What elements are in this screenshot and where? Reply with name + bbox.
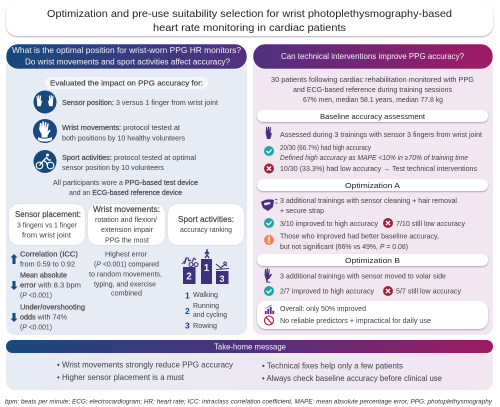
- card: wrist movements: [88, 204, 165, 245]
- panel: right, technical interventions: [253, 44, 493, 335]
- study population: 67% men, median 58.1 years, median 77.8 kg: [303, 95, 443, 104]
- wrist movement results: Highest error: [105, 250, 148, 258]
- title: Optimization and pre-use suitability selection for wrist photoplethysmography-based: [47, 9, 452, 20]
- baseline text: 20/30 (66.7%) had high accuracy: [280, 143, 371, 152]
- participants note: All participants wore a PPG-based test device: [53, 178, 198, 187]
- panel: take-home message: [6, 340, 493, 390]
- icon: check B: [264, 286, 274, 296]
- icon: warning: [264, 235, 274, 245]
- wrist movement results: typing, and exercise: [94, 280, 156, 288]
- sensor position text: Sensor position: 3 versus 1 finger from wrist joint: [62, 98, 218, 107]
- wrist movement results: [89, 250, 162, 298]
- panel: take-home message: Take-home message: [214, 342, 286, 352]
- sensor placement results: from 0.59 to 0.92: [20, 260, 75, 268]
- icon: rower: [216, 262, 229, 270]
- sport activities text: Sport activities: protocol tested at optimal: [62, 153, 196, 162]
- optimization A text: 3 additional trainings with sensor cleaning + hair removal: [280, 196, 457, 205]
- icon: up arrow: [10, 254, 18, 264]
- card: sport activities: accuracy ranking: [180, 225, 232, 234]
- icon: three fingers: [266, 126, 272, 139]
- icon: down arrow odds: [10, 313, 18, 322]
- icon: cross baseline: [264, 164, 274, 174]
- wrist movements text: Wrist movements: protocol tested at: [62, 123, 180, 132]
- sensor placement results: Correlation (ICC): [20, 250, 78, 258]
- icon: sensor cleaning: [261, 199, 278, 211]
- left question header: What is the optimal position for wrist-worn PPG HR monitors?: [12, 46, 242, 55]
- optimization A text: 3/10 improved to high accuracy: [280, 219, 378, 228]
- icon: check baseline: [264, 146, 274, 156]
- accuracy ranking list: Walking: [193, 290, 218, 299]
- study population: [271, 75, 474, 104]
- left question header: [6, 44, 247, 69]
- sensor placement results: odds with 74%: [20, 312, 68, 322]
- icon: prohibited: [264, 316, 274, 325]
- sensor placement results: (P <0.001): [20, 290, 52, 300]
- wrist movements text: [62, 123, 185, 142]
- heading: optimization A: [257, 179, 488, 191]
- baseline text: 10/30 (33.3%) had low accuracy → Test technical interventions: [280, 164, 477, 173]
- card: wrist movements: rotation and flexion/: [95, 215, 157, 224]
- title: [6, 2, 493, 36]
- footnote: bpm: beats per minute; ECG: electrocardiogram; HR: heart rate; ICC: intraclass correlation coefficient, MAPE: mean absolute percentage error; PPG: photoplethysmography: [5, 398, 493, 406]
- podium chart: [182, 249, 229, 284]
- podium chart: 3: [220, 274, 225, 284]
- heading: baseline: [257, 110, 488, 122]
- take-home bullets right: • Always check baseline accuracy before clinical use: [262, 374, 442, 383]
- icon: check A: [264, 218, 274, 228]
- right question header: [253, 44, 493, 69]
- card: sensor placement: from wrist joint: [22, 230, 71, 240]
- accuracy ranking list: [185, 290, 227, 330]
- card: sport activities: Sport activities:: [178, 215, 234, 224]
- accuracy ranking list: 1: [185, 290, 190, 300]
- optimization B text: 2/7 improved to high accuracy: [280, 286, 374, 296]
- baseline text: Defined high accuracy as MAPE <10% in ≥70% of training time: [280, 153, 468, 162]
- card: wrist movements: Wrist movements:: [93, 205, 160, 214]
- card: sport activities: [168, 204, 244, 245]
- heading: optimization B: [257, 254, 488, 266]
- heading: baseline: Baseline accuracy assessment: [320, 112, 426, 121]
- take-home bullets left: • Higher sensor placement is a must: [57, 373, 185, 382]
- take-home bullets right: [262, 362, 442, 383]
- sensor placement results: (P <0.001): [20, 322, 52, 332]
- icon: sensor position hands: [34, 90, 56, 114]
- podium chart: 1: [204, 263, 210, 274]
- optimization A text: 7/10 still low accuracy: [396, 219, 465, 228]
- heading: optimization B: Optimization B: [345, 256, 400, 265]
- overall summary box: [257, 301, 488, 329]
- card: sensor placement: Sensor placement:: [15, 210, 81, 219]
- icon: wrist movement hand: [33, 119, 57, 143]
- icon: down arrow error: [10, 281, 18, 290]
- icon: volar hand: [264, 268, 272, 283]
- optimization B text: [280, 272, 461, 296]
- baseline text: [280, 130, 482, 173]
- icon: chart: [265, 305, 274, 314]
- icon: walker: [205, 249, 209, 258]
- card: sensor placement: 3 fingers vs 1 finger: [17, 220, 78, 230]
- accuracy ranking list: 2: [185, 306, 190, 316]
- card: wrist movements: PPG the most: [105, 236, 149, 244]
- wrist movement results: combined: [111, 288, 142, 298]
- accuracy ranking list: and cycling: [193, 310, 227, 319]
- optimization B text: 3 additional trainings with sensor moved to volar side: [280, 272, 446, 280]
- icon: runner and cyclist: [182, 258, 198, 266]
- title: heart rate monitoring in cardiac patients: [153, 23, 346, 34]
- study population: and ECG-based reference during training sessions: [293, 85, 452, 94]
- take-home bullets left: • Wrist movements strongly reduce PPG accuracy: [57, 360, 234, 370]
- baseline text: Assessed during 3 trainings with sensor 3 fingers from wrist joint: [280, 130, 482, 139]
- participants note: and an ECG-based reference device: [69, 188, 182, 197]
- sensor placement results: Under/overshooting: [20, 302, 85, 312]
- wrist movement results: (P <0.001) compared: [94, 260, 159, 268]
- take-home bullets right: • Technical fixes help only a few patients: [262, 362, 403, 370]
- wrist movements text: both positions by 10 healthy volunteers: [62, 134, 185, 142]
- sensor placement results: Mean absolute: [20, 270, 67, 280]
- overall summary box: Overall: only 50% improved: [280, 304, 366, 313]
- sensor placement results: error with 8.3 bpm: [20, 280, 81, 290]
- evaluated heading: [45, 77, 208, 89]
- wrist movement results: to random movements,: [89, 270, 162, 278]
- accuracy ranking list: Running: [193, 301, 219, 310]
- card: sensor placement: [9, 204, 85, 245]
- participants note: [53, 178, 198, 197]
- icon: cyclist: [34, 150, 56, 173]
- card: wrist movements: extension impair: [101, 225, 154, 234]
- right question header: Can technical interventions improve PPG accuracy?: [281, 52, 465, 61]
- icon: cross A: [383, 218, 393, 228]
- accuracy ranking list: 3: [185, 320, 190, 330]
- left question header: Do wrist movements and sport activities affect accuracy?: [25, 58, 231, 66]
- accuracy ranking list: Rowing: [193, 321, 217, 330]
- optimization A text: + secure strap: [280, 206, 324, 215]
- optimization A text: Those who improved had better baseline accuracy,: [280, 232, 439, 240]
- sport activities text: sensor position by 10 volunteers: [62, 163, 164, 172]
- optimization A text: [280, 196, 465, 251]
- optimization B text: 5/7 still low accuracy: [396, 286, 461, 296]
- podium chart: 2: [186, 272, 192, 282]
- overall summary box: No reliable predictors + impractical for daily use: [280, 316, 431, 325]
- evaluated heading: Evaluated the impact on PPG accuracy for:: [50, 78, 203, 88]
- take-home bullets left: [57, 360, 234, 382]
- heading: optimization A: Optimization A: [345, 181, 401, 190]
- sport activities text: [62, 153, 196, 172]
- sensor placement results: [10, 250, 85, 332]
- study population: 30 patients following cardiac rehabilitation monitored with PPG: [271, 75, 474, 84]
- panel: left, position and movements: [6, 44, 247, 335]
- optimization A text: but not significant (66% vs 49%, P = 0.08): [280, 242, 408, 251]
- icon: cross B: [383, 286, 393, 296]
